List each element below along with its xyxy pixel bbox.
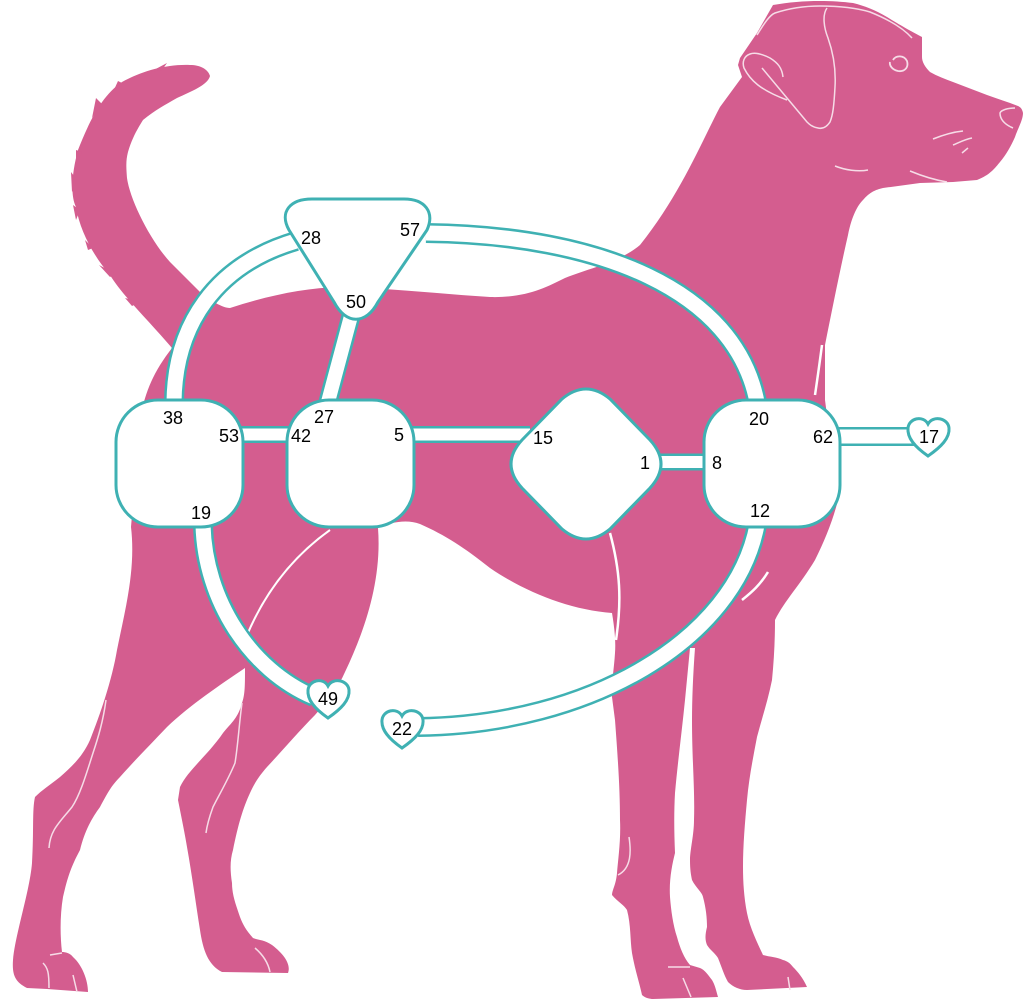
value 38: 38: [163, 408, 183, 428]
value 28: 28: [301, 228, 321, 248]
value 12: 12: [750, 501, 770, 521]
connector: 5 to 15: [410, 426, 530, 443]
connector: 62 to heart 17: [836, 427, 915, 446]
heart 49: 49: [318, 689, 338, 709]
value 20: 20: [749, 409, 769, 429]
connector: 28 to 38: [174, 241, 296, 402]
body and leg line details: [43, 700, 790, 997]
heart 17: [908, 419, 949, 456]
value 5: 5: [394, 425, 404, 445]
heart 22: [382, 711, 423, 748]
heart 17: 17: [919, 427, 939, 447]
chamber: triangle: [285, 199, 430, 319]
value 27: 27: [314, 407, 334, 427]
connector: 1 to 8: [655, 454, 707, 470]
value 57: 57: [400, 220, 420, 240]
chamber: centre rounded square: [287, 400, 414, 527]
chamber: left rounded square: [116, 400, 243, 527]
connector: 19 to heart 49: [203, 525, 314, 697]
chamber: diamond: [511, 389, 661, 539]
value 53: 53: [219, 426, 239, 446]
value 15: 15: [533, 428, 553, 448]
tail fur spikes: [71, 63, 167, 306]
connector: 12 to heart 22: [418, 525, 757, 727]
connector: 50 to 27: [328, 316, 351, 402]
heart 49: [308, 681, 349, 718]
value 50: 50: [346, 292, 366, 312]
heart 22: 22: [392, 719, 412, 739]
value 62: 62: [813, 427, 833, 447]
connector: 57 to 20: [426, 233, 757, 402]
chamber: right rounded square: [704, 400, 840, 527]
head line details: [743, 6, 1015, 182]
value 19: 19: [191, 503, 211, 523]
connector: 53 to 42: [240, 426, 290, 443]
value 1: 1: [640, 453, 650, 473]
value 8: 8: [712, 453, 722, 473]
value 42: 42: [291, 426, 311, 446]
